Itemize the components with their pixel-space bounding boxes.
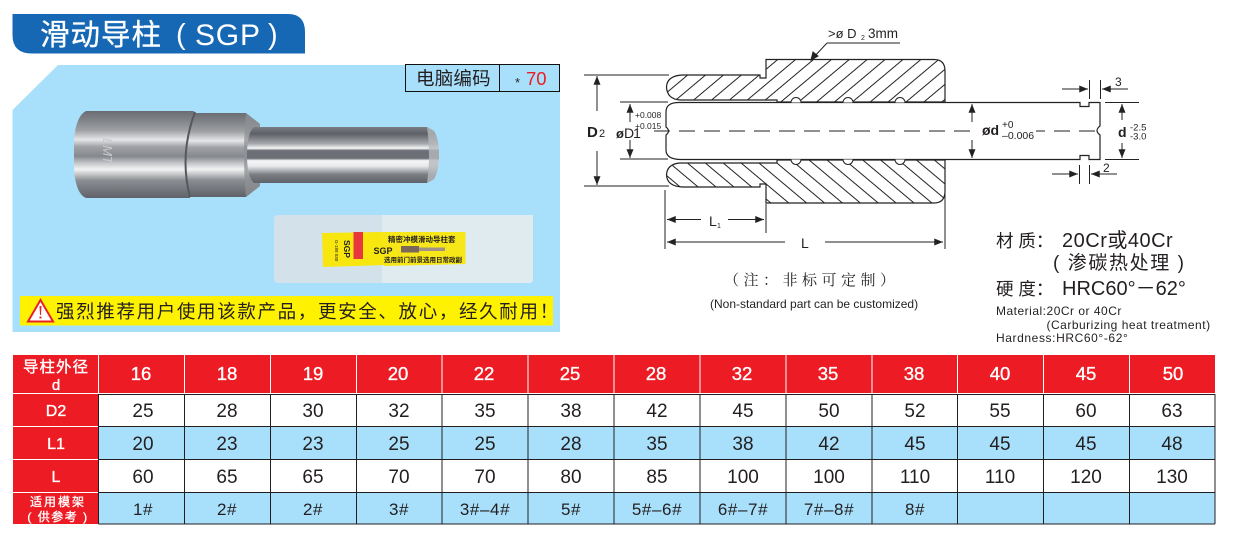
dimension: shoulder callout [811, 26, 900, 60]
row: D2: 25 [132, 401, 154, 422]
panel: product photo [12, 65, 560, 332]
dimension: phi d tolerance: ød [982, 122, 999, 138]
row: D2: 35 [474, 401, 496, 422]
row backgrounds [98, 426, 1215, 524]
red header row [13, 355, 1215, 524]
row: applicable die set: 7#–8# [804, 500, 854, 519]
material specification: 20Cr或40Cr [1062, 229, 1173, 252]
computer code box: * [515, 75, 520, 90]
row: d: 20 [388, 363, 408, 384]
dimension: phi d tolerance: +0 [1002, 120, 1014, 131]
row: L: 110 [985, 467, 1015, 488]
row: L: 100 [727, 467, 759, 488]
title banner: 滑动导柱 [40, 19, 162, 52]
row: D2 [132, 401, 1183, 422]
row: D2: 28 [216, 401, 238, 422]
dimension: shoulder callout: 3mm [868, 26, 898, 41]
row labels: D2 [46, 403, 66, 420]
dimension: phi D1: D1 [624, 125, 641, 141]
row: L: 110 [900, 467, 930, 488]
row: D2: 63 [1161, 401, 1183, 422]
dimension: d tolerance: -2.5 [1130, 122, 1146, 134]
row: applicable die set: 3#–4# [460, 500, 510, 519]
row: L1: 25 [388, 434, 410, 455]
row: applicable die set: 3# [389, 500, 409, 519]
dimension: L1 [665, 190, 766, 249]
material specification: Material:20Cr or 40Cr [996, 304, 1122, 318]
row: d: 28 [646, 363, 666, 384]
row: applicable die set: 5#–6# [632, 500, 682, 519]
icon: packaging box: G-188 030 [334, 240, 339, 262]
row: L: 130 [1156, 467, 1188, 488]
icon: packaging box [274, 215, 533, 283]
row: L1: 42 [818, 434, 840, 455]
title banner: ( [176, 19, 186, 51]
row: D2: 50 [818, 401, 840, 422]
row: applicable die set [133, 500, 925, 519]
icon: guide post photo: LMT [100, 138, 115, 165]
dimension: D2: D [587, 124, 598, 141]
dimension: phi D1: +0.008 [635, 110, 662, 120]
row: L: 60 [132, 467, 154, 488]
row labels [23, 358, 89, 524]
title banner [12, 14, 305, 54]
dimension: L1: L [709, 213, 717, 229]
material specification: 材 质： [996, 231, 1053, 251]
icon: packaging box: SGP [342, 240, 352, 258]
note: non-standard: (Non-standard part can be customized) [710, 297, 918, 311]
row: D2: 30 [302, 401, 324, 422]
row: d: 25 [560, 363, 580, 384]
material specification: ( 渗碳热处理 ) [1053, 252, 1186, 274]
row: applicable die set: 5# [561, 500, 581, 519]
icon: guide post photo [74, 111, 439, 198]
computer code box: 电脑编码 [416, 68, 491, 89]
row: d [131, 363, 1183, 384]
specification table [13, 355, 1215, 524]
row: L: 65 [302, 467, 324, 488]
material specification: (Carburizing heat treatment) [1046, 318, 1211, 332]
row: d: 35 [818, 363, 838, 384]
row: d: 38 [904, 363, 924, 384]
icon: packaging box: 精密冲模滑动导柱套 [388, 234, 456, 244]
material specification: Hardness:HRC60°-62° [996, 331, 1128, 345]
row: applicable die set: 1# [133, 500, 153, 519]
row labels: ( 供参考 ) [27, 509, 89, 524]
row: d: 40 [990, 363, 1010, 384]
upper hatched section [666, 60, 945, 102]
row: applicable die set: 8# [905, 500, 925, 519]
row: d: 22 [474, 363, 494, 384]
table grid [13, 355, 1215, 524]
row: L1: 20 [132, 434, 154, 455]
row: D2: 60 [1075, 401, 1097, 422]
dimension: phi d tolerance [972, 104, 1036, 158]
material specification [996, 229, 1211, 345]
row: L: 65 [216, 467, 238, 488]
row: L1: 25 [474, 434, 496, 455]
dimension: L1: 1 [717, 223, 721, 230]
row: L1: 48 [1161, 434, 1183, 455]
lower hatched section [666, 160, 945, 203]
row labels: 适用模架 [30, 495, 86, 509]
title banner: SGP [195, 19, 261, 52]
row: applicable die set: 2# [303, 500, 323, 519]
dimension: L: L [801, 235, 809, 251]
dimension: d tolerance: -3.0 [1130, 132, 1146, 142]
row: d: 45 [1076, 363, 1096, 384]
material specification: 硬 度： [996, 279, 1053, 299]
row: d: 19 [303, 363, 323, 384]
row: d: 18 [217, 363, 237, 384]
row: L1: 45 [904, 434, 926, 455]
row: D2: 45 [732, 401, 754, 422]
bore grooves [791, 98, 905, 164]
row: L: 85 [646, 467, 668, 488]
dimension: shoulder callout: >ø D [828, 26, 857, 41]
material specification: HRC60°－62° [1062, 278, 1186, 300]
row: D2: 52 [904, 401, 926, 422]
row: L1: 38 [732, 434, 754, 455]
dimension: phi D1 [616, 102, 668, 159]
row labels: L1 [47, 436, 65, 453]
technical drawing [584, 26, 1146, 251]
icon: packaging box: SGP [374, 246, 393, 256]
dimension: groove 3 [1062, 75, 1128, 99]
computer code box [406, 64, 560, 92]
dimension: groove 3: 3 [1115, 75, 1122, 89]
row: d: 16 [131, 363, 151, 384]
row: L1: 28 [560, 434, 582, 455]
row: L: 120 [1070, 467, 1102, 488]
row: L1: 35 [646, 434, 668, 455]
dimension: groove 2: 2 [1103, 161, 1110, 175]
dimension: D2 [584, 75, 669, 186]
warning band [20, 296, 560, 326]
row: applicable die set: 6#–7# [718, 500, 768, 519]
row: d: 50 [1163, 363, 1183, 384]
row: L1: 23 [216, 434, 238, 455]
dimension: d tolerance [1105, 102, 1146, 160]
dimension: phi d tolerance: –0.006 [1002, 130, 1034, 142]
dimension: d tolerance: d [1118, 124, 1127, 140]
warning band: 强烈推荐用户使用该款产品，更安全、放心，经久耐用！ [56, 301, 560, 322]
row: L1: 45 [1075, 434, 1097, 455]
row: D2: 55 [989, 401, 1011, 422]
row labels: 导柱外径 [23, 358, 89, 376]
computer code box: 70 [526, 68, 547, 89]
row: L: 80 [560, 467, 582, 488]
row labels: d [52, 377, 60, 394]
row: d: 32 [732, 363, 752, 384]
dimension: phi D1: ø [616, 126, 624, 141]
row: L: 70 [474, 467, 496, 488]
row: L: 100 [813, 467, 845, 488]
row labels: L [52, 469, 61, 486]
dimension: D2: 2 [599, 128, 605, 140]
row: applicable die set: 2# [217, 500, 237, 519]
row: L1: 45 [989, 434, 1011, 455]
note: non-standard [710, 272, 918, 311]
row: D2: 38 [560, 401, 582, 422]
row: D2: 42 [646, 401, 668, 422]
title banner: ) [268, 19, 278, 51]
icon: warning triangle [28, 300, 53, 322]
row: L: 70 [388, 467, 410, 488]
dimension: groove 2 [1052, 161, 1117, 184]
row: L1: 23 [302, 434, 324, 455]
dimension: shoulder callout: 2 [861, 35, 865, 42]
icon: packaging box: 选用前门前景选用日常政副 [384, 255, 462, 264]
note: non-standard: （注：非标可定制） [724, 272, 900, 289]
row: L [132, 467, 1188, 488]
centre line [654, 130, 1097, 132]
dimension: phi D1: +0.015 [635, 121, 662, 131]
row: D2: 32 [388, 401, 410, 422]
bore and shaft outline [666, 102, 1100, 160]
row: L1 [132, 434, 1183, 455]
